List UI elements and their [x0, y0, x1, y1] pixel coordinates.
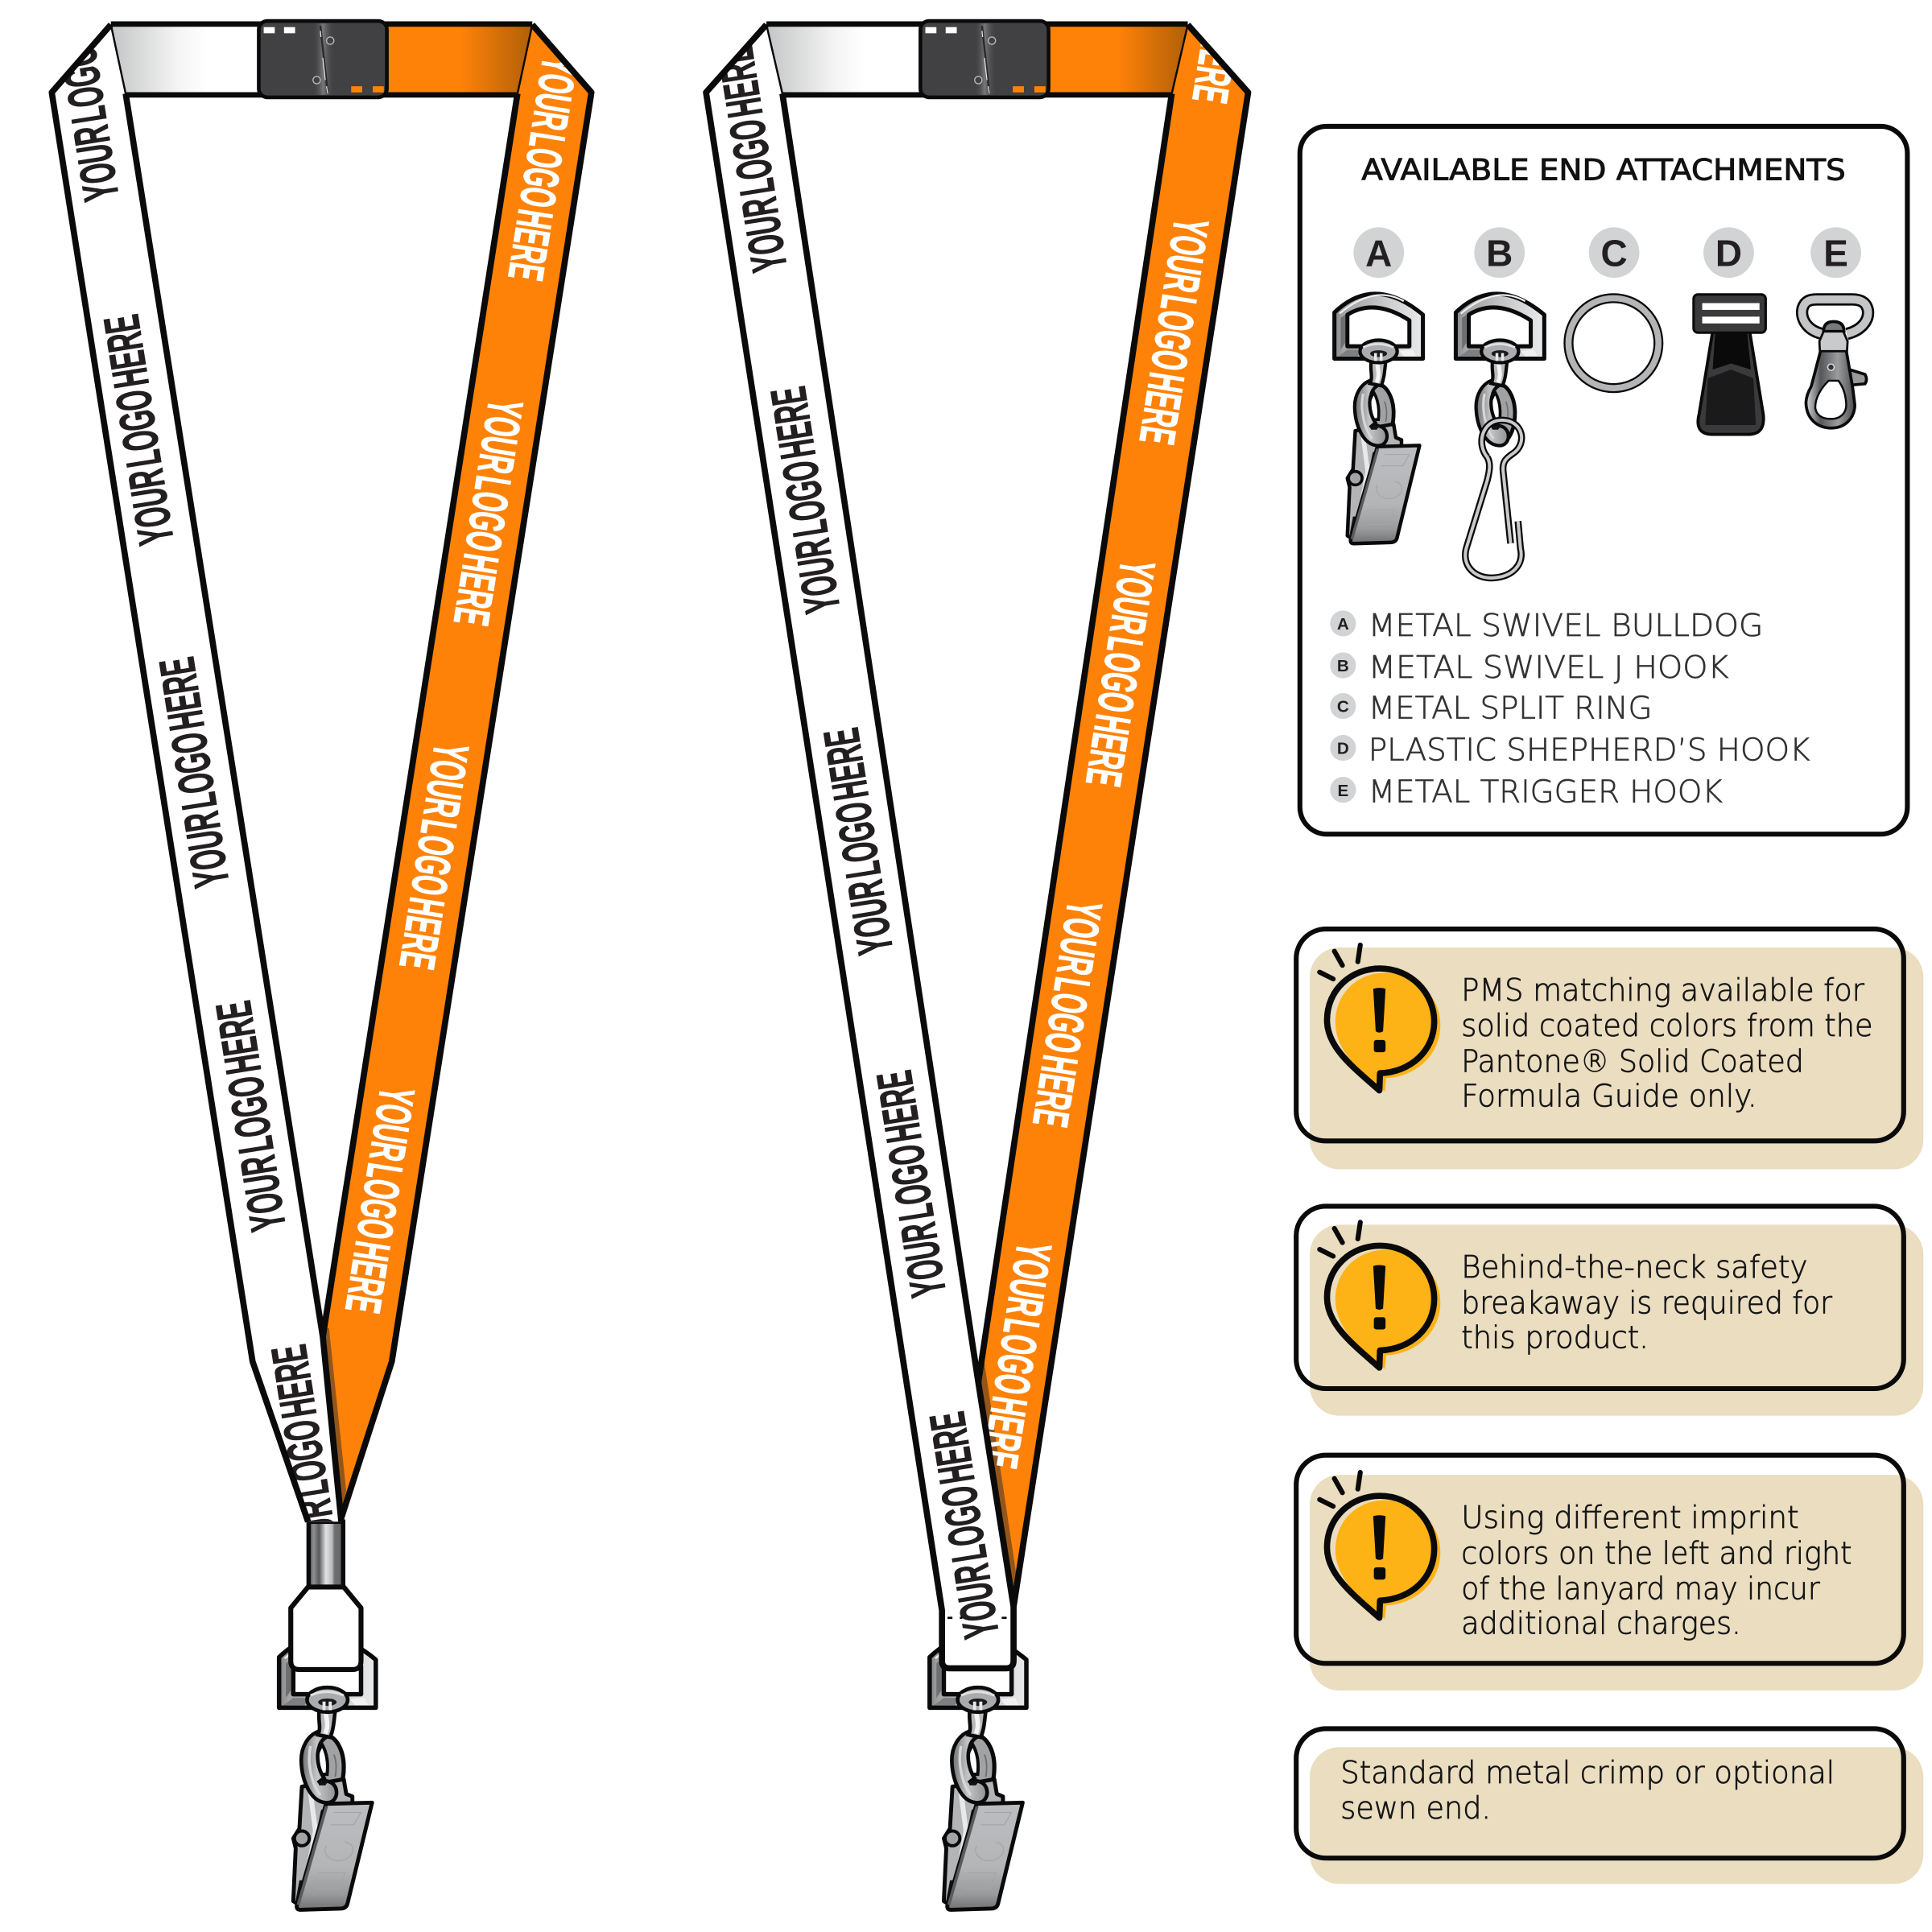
- callout text: [1461, 1500, 1852, 1642]
- orange strap: [321, 25, 592, 1521]
- callout text: [1461, 972, 1873, 1114]
- attachment D: plastic shepherd's hook: [1694, 295, 1765, 435]
- callout text: this product.: [1461, 1319, 1649, 1356]
- callout text: sewn end.: [1340, 1790, 1491, 1827]
- icon: alert bubble: [1319, 945, 1440, 1092]
- attachment: swivel ring and bulldog clip: [279, 1637, 376, 1909]
- icon: alert bubble: [1319, 1222, 1440, 1369]
- orange strap: YOUR LOGO HERE: [1022, 897, 1113, 1131]
- callout: crimp or sewn end: [1296, 1728, 1923, 1884]
- orange strap: YOUR LOGO HERE: [1129, 214, 1219, 448]
- letter badges: C: [1601, 233, 1628, 275]
- attachment legend: PLASTIC SHEPHERD’S HOOK: [1368, 732, 1810, 768]
- callout: safety breakaway: [1296, 1206, 1923, 1416]
- callout: imprint colors: [1296, 1455, 1923, 1690]
- attachment A: metal swivel bulldog: [1335, 294, 1423, 543]
- callout text: of the lanyard may incur: [1461, 1571, 1820, 1608]
- letter badges: A: [1365, 233, 1392, 275]
- letter badges: E: [1823, 233, 1848, 275]
- icon: alert bubble: [1319, 1472, 1440, 1619]
- callout text: Behind-the-neck safety: [1461, 1249, 1807, 1286]
- attachment legend: A: [1337, 615, 1349, 634]
- callout text: colors on the left and right: [1461, 1535, 1852, 1571]
- white strap with sewn end: YOUR LOGO HERE: [919, 1408, 1010, 1642]
- white strap: YOUR LOGO HERE: [94, 311, 185, 548]
- attachment legend: METAL SPLIT RING: [1368, 690, 1653, 726]
- white strap: YOUR LOGO HERE: [262, 1341, 353, 1579]
- callout text: Formula Guide only.: [1461, 1078, 1757, 1114]
- metal crimp: [308, 1521, 343, 1587]
- orange strap: YOUR LOGO HERE: [971, 1238, 1062, 1472]
- top neck band: [766, 23, 1188, 95]
- callout text: breakaway is required for: [1461, 1286, 1832, 1322]
- breakaway buckle: [258, 21, 387, 97]
- attachment legend: D: [1337, 740, 1349, 758]
- attachment legend: METAL SWIVEL J HOOK: [1368, 650, 1728, 686]
- callout text: PMS matching available for: [1461, 972, 1864, 1009]
- callout text: Pantone® Solid Coated: [1461, 1044, 1804, 1080]
- white strap with sewn end: YOUR LOGO HERE: [761, 383, 851, 617]
- attachment legend: C: [1337, 698, 1349, 716]
- orange strap: YOUR LOGO HERE: [334, 1083, 425, 1317]
- attachment B: metal swivel J hook: [1455, 294, 1544, 578]
- white strap with sewn end: YOUR LOGO HERE: [814, 724, 904, 958]
- white strap with sewn end: [706, 25, 1013, 1668]
- panel heading: AVAILABLE END ATTACHMENTS: [1361, 152, 1846, 187]
- attachment C: metal split ring: [1568, 298, 1658, 388]
- orange strap: YOUR LOGO HERE: [1075, 556, 1165, 790]
- white strap: YOUR LOGO HERE: [206, 997, 297, 1235]
- top neck band: [111, 23, 532, 95]
- attachment E: metal trigger hook: [1802, 299, 1868, 428]
- callout text: solid coated colors from the: [1461, 1008, 1873, 1044]
- callout text: [1340, 1755, 1835, 1827]
- letter badges: [1353, 227, 1861, 278]
- attachment legend: [1330, 608, 1810, 810]
- orange strap: YOUR LOGO HERE: [497, 53, 587, 284]
- attachment legend: B: [1337, 657, 1349, 675]
- panel: available end attachments: [1300, 126, 1907, 834]
- lanyard: white and orange with bulldog clip and crimp: [39, 0, 592, 1909]
- white sewn tab: [291, 1587, 361, 1670]
- letter badges: B: [1486, 233, 1513, 275]
- lanyard: white and orange with sewn end: [706, 0, 1272, 1909]
- attachment legend: E: [1337, 782, 1348, 800]
- callout text: Standard metal crimp or optional: [1340, 1755, 1835, 1791]
- callout text: Using different imprint: [1461, 1500, 1799, 1536]
- attachment legend: METAL TRIGGER HOOK: [1368, 774, 1723, 810]
- white strap with sewn end: YOUR LOGO HERE: [867, 1067, 957, 1301]
- attachment: swivel ring and bulldog clip: [930, 1637, 1026, 1909]
- orange strap: [978, 23, 1251, 1607]
- white strap: YOUR LOGO HERE: [149, 654, 241, 891]
- callout: PMS matching: [1296, 929, 1923, 1170]
- orange strap: YOUR LOGO HERE: [388, 739, 479, 973]
- letter badges: D: [1715, 233, 1742, 275]
- callout text: additional charges.: [1461, 1606, 1741, 1642]
- attachment legend: METAL SWIVEL BULLDOG: [1368, 608, 1763, 644]
- callout text: [1461, 1249, 1832, 1356]
- white strap: [48, 23, 345, 1523]
- breakaway buckle: [920, 21, 1049, 97]
- orange strap: YOUR LOGO HERE: [443, 395, 533, 630]
